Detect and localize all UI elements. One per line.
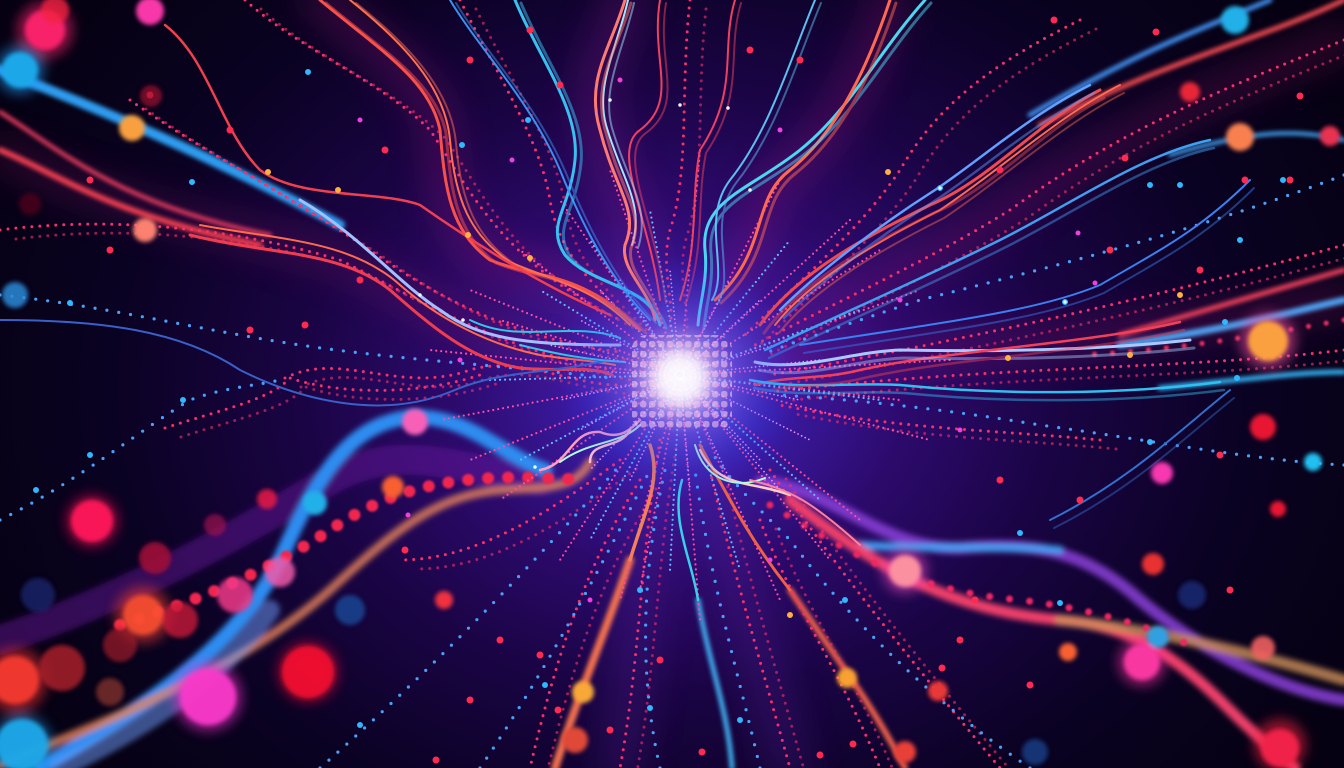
blurred foreground bands: lower left <box>0 417 590 768</box>
dotted trails: blue <box>0 175 1344 768</box>
dotted trails: large blurred beads <box>120 320 1344 650</box>
blurred bottom filaments <box>555 560 905 768</box>
radial dust around the core <box>430 150 950 620</box>
bokeh orbs: right side <box>562 6 1340 767</box>
thin bright filaments: left fan <box>0 25 625 405</box>
central chip glow <box>555 253 805 503</box>
thin bright filaments: right fan <box>750 85 1250 520</box>
thin bright filaments: right fan parallel copy <box>754 93 1254 528</box>
thin bright filaments: top fan <box>320 0 925 330</box>
blurred upper left and right bands <box>0 0 1344 388</box>
thin bright filaments: top fan parallel copy <box>326 3 931 333</box>
thin bright filaments: bottom fan <box>540 420 860 600</box>
bokeh orbs: left side <box>0 0 453 768</box>
chip: grid of cells <box>632 335 732 430</box>
blurred foreground bands: lower right <box>760 482 1344 768</box>
